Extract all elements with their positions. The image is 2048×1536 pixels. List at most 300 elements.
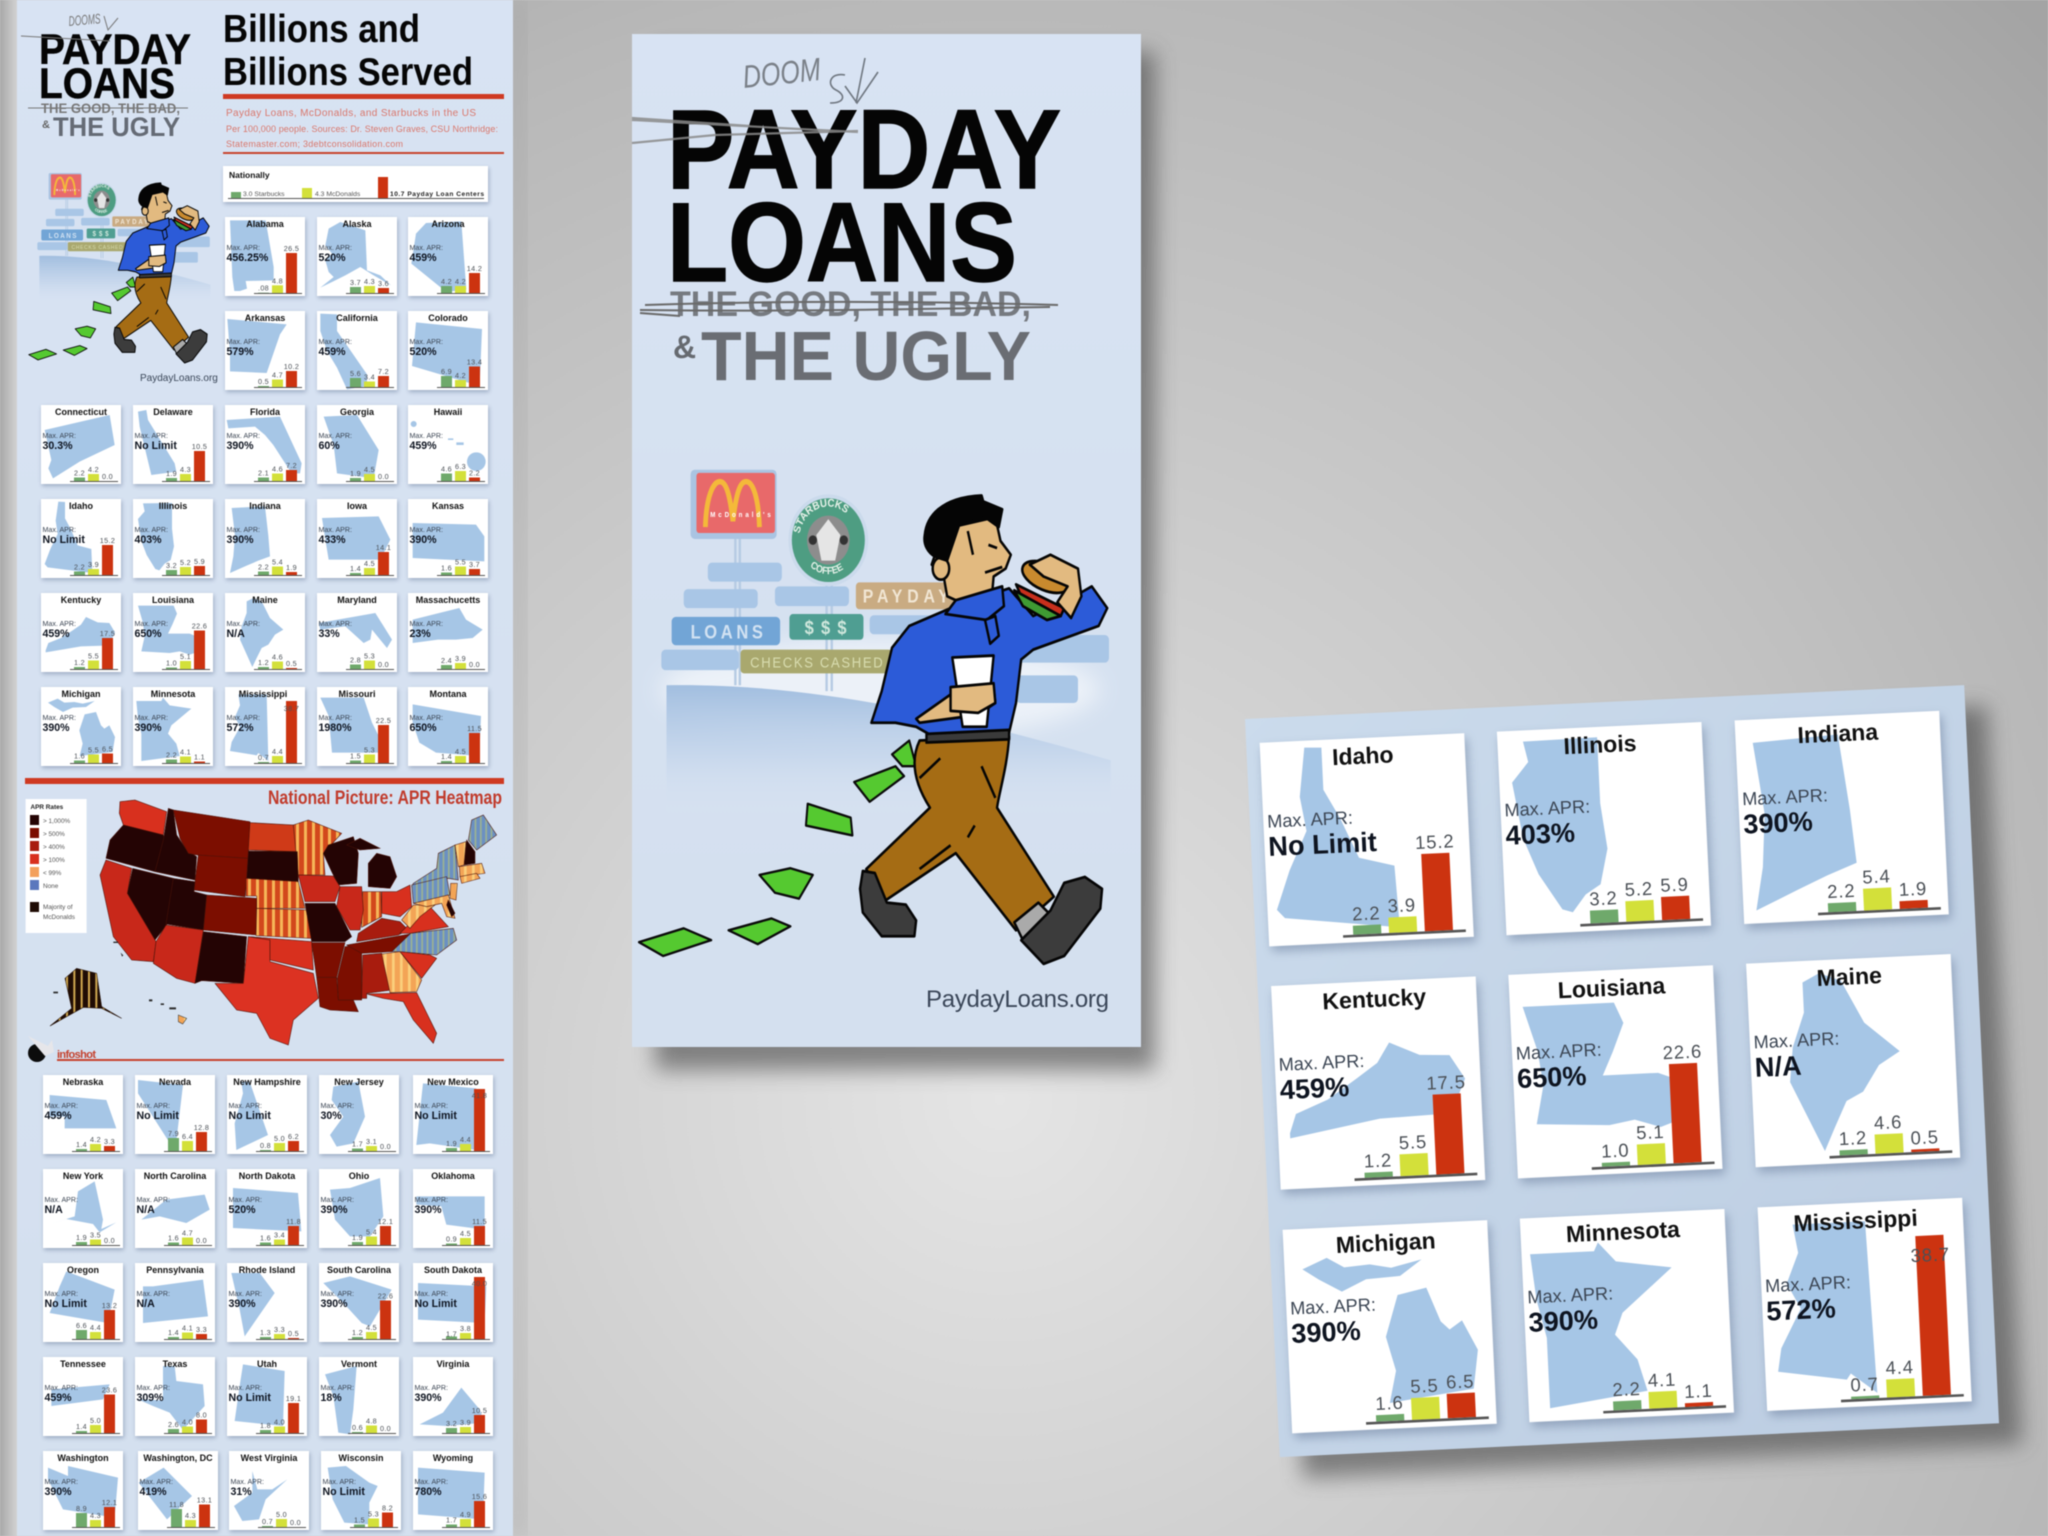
card: Maine: Max. APR: [226,620,260,628]
card: Mississippi: Mississippi [239,689,287,699]
card: Washington: 390% [44,1486,72,1498]
card: Kansas: 5.5 [455,558,466,566]
card: Indiana: 1.9 [286,563,297,572]
card: Nebraska: Max. APR: [44,1102,78,1110]
card: Nationally: 10.7 Payday Loan Centers [390,191,484,198]
card: North Dakota: North Dakota [239,1171,296,1181]
enlarged card: Indiana: Max. APR: [1742,784,1828,809]
card: Virginia: 10.5 [472,1406,487,1415]
card: Pennsylvania: Max. APR: [136,1290,170,1298]
card: Iowa: 1.4 [350,564,361,573]
card: North Carolina: N/A [136,1204,155,1216]
sign: PAYDAY: PAYDAY [863,587,949,607]
card: Oklahoma: Max. APR: [414,1196,448,1204]
card: Mississippi: Max. APR: [226,714,260,722]
enlarged card: Kentucky: Max. APR: [1278,1050,1365,1075]
card: Pennsylvania [135,1263,215,1342]
card: New Mexico [413,1075,493,1154]
card: New Jersey [319,1075,399,1154]
card: Maryland: 0.0 [378,660,389,669]
card: Vermont: Max. APR: [320,1384,354,1392]
road hill [666,685,1111,814]
card: Hawaii [408,405,488,484]
sign: LOANS: LOANS [691,621,763,643]
card: Nevada: Max. APR: [136,1102,170,1110]
enlarged card: Kentucky: 17.5 [1426,1071,1466,1094]
card: Utah: 1.8 [260,1421,271,1430]
enlarged card: Illinois: 5.9 [1660,873,1689,896]
card: Utah [227,1357,307,1436]
card: Georgia: 60% [318,440,340,452]
card: Montana: 1.4 [441,752,452,761]
card: Florida: Florida [250,407,281,417]
card: North Carolina: North Carolina [144,1171,207,1181]
card: Massachucetts: 0.0 [469,660,480,669]
card: Wisconsin: 5.3 [368,1510,379,1518]
heading: Billions and Billions Served [223,8,473,94]
enlarged card: Michigan: 6.5 [1446,1370,1475,1393]
card: Idaho: 15.2 [100,536,115,545]
enlarged card: Mississippi: Max. APR: [1765,1271,1851,1296]
card: New York [43,1169,123,1248]
card: Washington, DC: 419% [140,1486,167,1498]
enlarged card: Michigan: 390% [1291,1315,1361,1349]
card: Colorado: Colorado [428,313,468,323]
card: Virginia: 390% [414,1392,442,1404]
card: Texas: 8.0 [196,1410,207,1420]
card: Tennessee: 459% [44,1392,72,1404]
card: Oregon: 6.6 [76,1321,87,1330]
card: Delaware: 10.5 [192,442,207,451]
card: New Jersey: Max. APR: [320,1102,354,1110]
card: South Dakota: 3.8 [460,1324,471,1333]
heatmap top rule [25,778,504,784]
enlarged card: Kentucky: 1.2 [1363,1149,1393,1172]
card: Montana [408,687,488,766]
card: Rhode Island: 3.3 [274,1325,285,1334]
illustration: signs, man with burger and coffee, falling money [637,469,1110,966]
card: Vermont [319,1357,399,1436]
enlarged card: Maine [1746,954,1960,1167]
strip illustration: man with burger and money [29,173,210,363]
card: Kentucky [41,593,121,672]
card: Maryland: Maryland [337,595,377,605]
card: Missouri: 1980% [318,722,352,734]
heading: Billions and Billions Served: Billions and [223,8,420,51]
card: Oregon: 13.2 [102,1301,117,1310]
card: Indiana: 390% [226,534,254,546]
card: Louisiana [133,593,213,672]
card: Colorado: 13.4 [467,358,482,366]
enlarged card: Indiana: 5.4 [1862,865,1891,888]
card: New York: 1.9 [76,1233,87,1242]
card: West Virginia [229,1451,309,1530]
strip title: Payday Loans: PAYDAY [39,26,191,74]
card: Alaska: 3.7 [350,278,361,287]
card: Washington, DC: 4.3 [185,1511,196,1520]
card: Pennsylvania: 4.1 [182,1324,193,1332]
heading: Billions and Billions Served: Billions Served [223,51,473,94]
card: North Carolina: 4.7 [182,1228,193,1238]
card: South Carolina: Max. APR: [320,1290,354,1298]
card: South Carolina: 1.2 [352,1328,363,1337]
card: Alabama: 456.25% [226,252,269,264]
heading: National Picture APR Heatmap: National Picture: APR Heatmap [268,788,502,809]
card: Ohio: Ohio [349,1171,370,1181]
card: Connecticut: 4.2 [88,465,99,474]
card: Rhode Island [227,1263,307,1342]
card: California: California [336,313,379,323]
card: Tennessee: 5.0 [90,1416,101,1425]
card: New Mexico: 41.8 [472,1091,487,1100]
card: Nevada: Nevada [159,1077,192,1087]
card: Pennsylvania: N/A [136,1298,155,1310]
card: Illinois: 5.9 [194,557,205,566]
sign: $$$ [789,614,863,640]
card: Delaware: 4.3 [180,465,191,474]
card: Maine: Maine [252,595,278,605]
legend: APR rates: Majority of [43,904,73,911]
card: Wisconsin: No Limit [322,1486,365,1498]
card: South Carolina: 390% [320,1298,348,1310]
card: Utah: 4.0 [274,1418,285,1426]
card: Alabama: 26.5 [284,244,299,253]
enlarged card: Minnesota: Max. APR: [1527,1282,1614,1307]
card: West Virginia: 0.0 [290,1518,301,1527]
card: Wyoming [413,1451,493,1530]
card: Nebraska: 459% [44,1110,72,1122]
card: Maine: 1.2 [258,658,269,667]
card: Connecticut: Connecticut [55,407,107,417]
card: New Jersey: 3.1 [366,1137,377,1146]
card: New Hampshire: New Hampshire [233,1077,301,1087]
card: Wisconsin: 8.2 [382,1504,393,1512]
card: Arkansas: 4.7 [272,370,283,380]
card: West Virginia: 31% [230,1486,252,1498]
enlarged card: Indiana: 2.2 [1827,880,1856,902]
card: Wyoming: 15.6 [472,1492,487,1501]
card: Michigan: 390% [42,722,70,734]
card: Nebraska: 3.3 [104,1137,115,1146]
card: Virginia: Virginia [437,1359,470,1369]
enlarged card: Mississippi [1758,1198,1972,1411]
handwritten note: DOOMS: DOOM [741,51,823,95]
legend: APR rates: > 400% [43,844,65,851]
card: New Jersey: 1.7 [352,1140,363,1148]
sign: $$$: $$$ [805,617,847,638]
strip title: Payday Loans [21,10,191,142]
subtitle rule [223,152,504,154]
strip title: Payday Loans: THE UGLY [53,112,180,142]
card: Massachucetts: 2.4 [441,656,452,665]
enlarged card: Louisiana: 1.0 [1601,1139,1630,1162]
enlarged card: Mississippi: 0.7 [1850,1373,1879,1396]
card: Oklahoma: 4.5 [460,1229,471,1238]
card: Wyoming: 780% [414,1486,442,1498]
card: Rhode Island: Max. APR: [228,1290,262,1298]
subtitle: and the ugly: & [673,329,696,365]
panel: enlarged state cards [1245,684,2022,1479]
card: Pennsylvania: 1.4 [168,1328,179,1337]
card: Pennsylvania: Pennsylvania [146,1265,205,1275]
card: Michigan: 1.6 [74,752,85,760]
card: Ohio: 5.4 [366,1228,377,1236]
card: New Hampshire: Max. APR: [228,1102,262,1110]
subtitle: and the ugly: THE UGLY [701,317,1031,395]
card: Arkansas: Arkansas [245,313,285,323]
enlarged card: Mississippi: 38.7 [1910,1243,1950,1266]
card: Iowa: 14.1 [376,543,391,552]
card: Maryland: Max. APR: [318,620,352,628]
card: Mississippi [225,687,305,766]
card: Indiana: 5.4 [272,558,283,566]
card: Idaho: No Limit [42,534,85,546]
subtitle text: Per 100,000 people. Sources: Dr. Steven Graves, CSU Northridge: [226,124,498,134]
logo: McDonald's sign [691,470,777,539]
logo: infoshot: infoshot [57,1049,96,1061]
card: Kentucky: 5.5 [88,652,99,660]
card: North Dakota [227,1169,307,1248]
card: Missouri: 1.5 [350,752,361,760]
card: South Dakota [413,1263,493,1342]
enlarged card: Idaho: No Limit [1268,826,1377,862]
card: Massachucetts: 3.9 [455,654,466,663]
card: Ohio: 390% [320,1204,348,1216]
card: Vermont: 0.6 [352,1423,363,1432]
scribble over PAYDAY [632,118,858,143]
credit: PaydayLoans.org: PaydayLoans.org [926,986,1109,1013]
card: Nevada: 6.4 [182,1132,193,1141]
legend: APR rates: APR Rates [30,804,64,811]
card: Washington, DC: 11.8 [169,1500,184,1509]
card: Arkansas [225,311,305,390]
card: Alabama: Max. APR: [226,244,260,252]
enlarged card: Michigan: 5.5 [1410,1375,1439,1397]
card: Alaska: 4.3 [364,277,375,286]
falling money [639,741,916,956]
card: Texas [135,1357,215,1436]
card: Minnesota: 390% [134,722,162,734]
logo: infoshot [28,1036,96,1062]
card: Oregon [43,1263,123,1342]
card: Oregon: 4.4 [90,1323,101,1332]
strip title: Payday Loans: THE GOOD, THE BAD, [41,100,180,116]
card: New Mexico: New Mexico [427,1077,479,1087]
card: New Mexico: 1.9 [446,1139,457,1148]
card: Texas: Max. APR: [136,1384,170,1392]
card: California [317,311,397,390]
card: Delaware: 1.9 [166,469,177,478]
card: Wyoming: 1.7 [446,1516,457,1524]
card: Washington, DC: Max. APR: [140,1478,173,1486]
card: Minnesota: 1.1 [194,752,205,762]
card: Arizona: Max. APR: [410,244,443,252]
sign: PAYDAY [856,582,956,609]
card: Tennessee: 1.4 [76,1422,87,1431]
card: Georgia: 1.9 [350,469,361,478]
card: Kansas: 390% [410,534,437,546]
card: New Hampshire: 6.2 [288,1132,299,1141]
card: New Mexico: No Limit [414,1110,457,1122]
enlarged card: Indiana: Indiana [1797,718,1880,748]
card: Maryland: 2.8 [350,656,361,664]
card: Nevada: No Limit [136,1110,179,1122]
card: Montana: Max. APR: [410,714,443,722]
panel: full infographic strip [17,0,525,1536]
card: Texas: 309% [136,1392,164,1404]
card: Kentucky: 17.5 [100,629,115,638]
heatmap bottom rule [57,1059,504,1061]
title: PAYDAY LOANS [667,87,1061,305]
card: Washington, DC: Washington, DC [143,1453,213,1463]
enlarged card: Louisiana: Max. APR: [1515,1039,1602,1064]
card: Missouri: Max. APR: [318,714,352,722]
enlarged card: Maine: 0.5 [1910,1126,1939,1148]
card: Michigan: 5.5 [88,746,99,754]
card: Ohio [319,1169,399,1248]
card: Ohio: 12.1 [378,1217,393,1226]
enlarged card: Indiana: 390% [1743,805,1813,840]
card: Delaware: No Limit [134,440,177,452]
handwritten note: DOOMS [741,51,878,103]
card: Washington [43,1451,123,1530]
card: North Dakota: Max. APR: [228,1196,262,1204]
subtitle text [226,108,498,149]
subtitle text: Statemaster.com; 3debtconsolidation.com [226,139,403,149]
card: Wyoming: Wyoming [433,1453,473,1463]
map: US APR heatmap [50,800,497,1045]
legend: APR rates: McDonalds [43,914,75,921]
card: Ohio: 1.9 [352,1233,363,1242]
card: California: 5.6 [350,369,361,378]
card: New Hampshire: No Limit [228,1110,271,1122]
card: Arkansas: 0.5 [258,377,269,386]
blank sign blocks [661,563,1109,703]
sign: CHECKS CASHED: CHECKS CASHED [750,654,883,671]
card: Maryland [317,593,397,672]
card: Utah: Utah [257,1359,277,1369]
card: Florida: Max. APR: [226,432,260,440]
card: Georgia: Georgia [340,407,375,417]
card: Hawaii: 459% [410,440,437,452]
card: Colorado: 6.9 [441,367,452,376]
card: Nevada: 12.8 [194,1123,209,1132]
card: Michigan [41,687,121,766]
card: Oklahoma: Oklahoma [431,1171,476,1181]
card: Colorado: Max. APR: [410,338,443,346]
card: Nevada: 7.9 [168,1129,179,1138]
enlarged card: Illinois: Illinois [1563,730,1637,759]
title: PAYDAY LOANS: LOANS [667,180,1017,305]
card: Nationally: 3.0 Starbucks [243,191,285,198]
enlarged card: Louisiana: 5.1 [1636,1121,1665,1143]
card: Georgia: 4.5 [364,465,375,474]
card: Michigan: 6.5 [102,744,113,754]
enlarged card: Michigan: Michigan [1335,1227,1436,1258]
card: Rhode Island: 1.3 [260,1328,271,1337]
enlarged card: Maine: Maine [1816,962,1883,991]
logo: McDonald's sign: McDonald's [710,512,771,519]
card: Missouri: 22.5 [376,716,391,725]
card: Oklahoma: 390% [414,1204,442,1216]
card: Georgia: Max. APR: [318,432,352,440]
card: Mississippi: 572% [226,722,254,734]
heading rule [223,94,504,99]
enlarged card: Kentucky [1271,976,1485,1190]
enlarged card: Idaho: Idaho [1331,741,1394,770]
card: Ohio: Max. APR: [320,1196,354,1204]
card: Nebraska: Nebraska [63,1077,104,1087]
card: Massachucetts: 23% [410,628,431,640]
legend: APR rates: None [43,883,59,890]
card: Montana: 650% [410,722,437,734]
card: Idaho: 3.9 [88,560,99,569]
card: Texas: 2.6 [168,1420,179,1429]
card: Illinois [133,499,213,578]
card: Arkansas: 10.2 [284,362,299,371]
card: California: 459% [318,346,346,358]
card: Indiana: Max. APR: [226,526,260,534]
card: Kentucky: 459% [42,628,70,640]
card: Kansas: 3.7 [469,560,480,569]
card: New Jersey: 0.0 [380,1142,391,1151]
card: New Jersey: 30% [320,1110,342,1122]
card: Florida [225,405,305,484]
card: Hawaii: 4.6 [441,464,452,474]
card: Oregon: Oregon [67,1265,99,1275]
card: Iowa: Iowa [347,501,368,511]
card: Washington: 12.1 [102,1498,117,1507]
card: Florida: 4.6 [272,464,283,474]
card: North Dakota: 520% [228,1204,256,1216]
sign poles [735,539,832,691]
card: Massachucetts: Massachucetts [416,595,480,605]
card: Kansas: Max. APR: [410,526,443,534]
card: Illinois: 3.2 [166,561,177,570]
card: Arkansas: Max. APR: [226,338,260,346]
card: Arizona: Arizona [431,219,465,229]
left edge band [0,0,17,1536]
enlarged card: Idaho [1260,733,1474,946]
strip title: Payday Loans: LOANS [39,60,175,108]
card: Virginia: Max. APR: [414,1384,448,1392]
sign: LOANS [672,617,780,645]
card: Mississippi: 4.4 [272,747,283,756]
card: Louisiana: 22.6 [192,622,207,630]
card: Connecticut: 0.0 [102,472,113,481]
card: New York: 3.5 [90,1230,101,1240]
card: Idaho: 2.2 [74,562,85,572]
card: New Mexico: Max. APR: [414,1102,448,1110]
card: Wisconsin [321,1451,401,1530]
card: Utah: Max. APR: [228,1384,262,1392]
card: Nationally [223,166,488,202]
card: Connecticut: 2.2 [74,468,85,478]
card: Iowa [317,499,397,578]
card: North Carolina: 0.0 [196,1236,207,1245]
card: Florida: 2.1 [258,468,269,478]
card: Tennessee: 23.6 [102,1386,117,1394]
card: Iowa: Max. APR: [318,526,352,534]
enlarged card: Kentucky: 5.5 [1398,1131,1428,1153]
card: Indiana [225,499,305,578]
card: North Carolina: Max. APR: [136,1196,170,1204]
card: Arizona: 4.2 [455,277,466,286]
card: Connecticut: 30.3% [42,440,73,452]
enlarged card: Minnesota: 390% [1528,1303,1599,1338]
enlarged card: Minnesota: Minnesota [1565,1216,1682,1247]
card: North Dakota: 3.4 [274,1230,285,1240]
